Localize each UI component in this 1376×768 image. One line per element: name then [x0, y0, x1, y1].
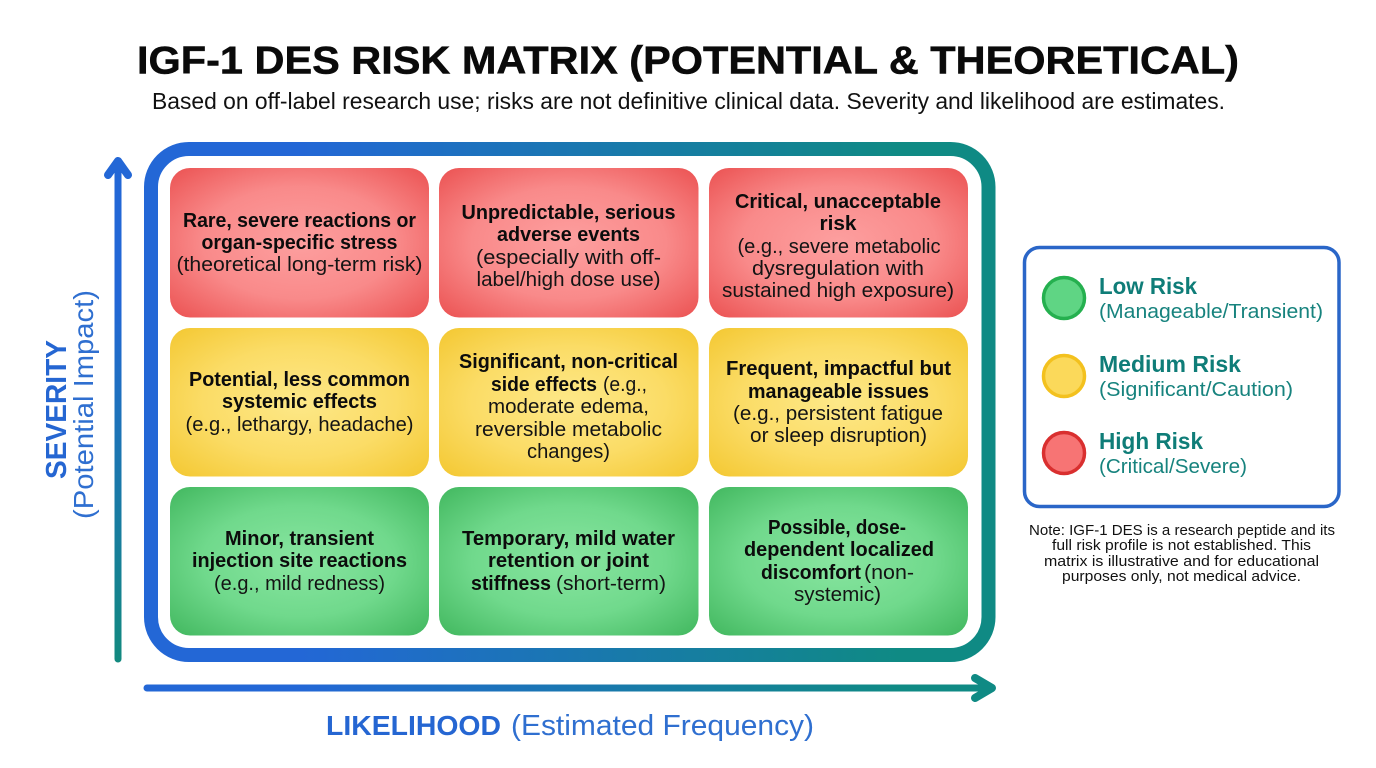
cell: localized discomfort (low risk): Possible, dose- [768, 516, 906, 539]
cell: significant side effects (medium risk): changes) [527, 441, 610, 463]
cell: localized discomfort (low risk): discomfort [761, 561, 861, 584]
cell: unpredictable serious events (high risk): (especially with off- [476, 247, 661, 269]
cell: critical unacceptable risk (high risk): sustained high exposure) [722, 280, 954, 302]
y axis label: severity: SEVERITY [41, 340, 73, 479]
cell: unpredictable serious events (high risk): adverse events [497, 223, 640, 246]
y axis arrow: severity [108, 161, 128, 659]
legend item: medium risk: Medium Risk [1099, 351, 1241, 377]
subtitle: Based on off-label research use; risks are not definitive clinical data. Severity and likelihood are estimates. [152, 88, 1225, 114]
legend item: medium risk: (Significant/Caution) [1099, 378, 1293, 401]
cell: temporary water retention (low risk): (short-term) [556, 573, 666, 595]
cell: frequent manageable issues (medium risk): Frequent, impactful but [726, 357, 951, 380]
cell: localized discomfort (low risk) [709, 487, 968, 636]
cell: critical unacceptable risk (high risk) [709, 168, 968, 318]
x axis label: likelihood: (Estimated Frequency) [511, 710, 814, 742]
cell: critical unacceptable risk (high risk): (e.g., severe metabolic [738, 236, 940, 258]
cell: minor injection site reactions (low risk): injection site reactions [192, 549, 407, 572]
cell: frequent manageable issues (medium risk): or sleep disruption) [750, 425, 927, 447]
cell: significant side effects (medium risk) [439, 328, 698, 476]
cell: unpredictable serious events (high risk) [439, 168, 698, 318]
title: IGF-1 DES RISK MATRIX (POTENTIAL & THEORETICAL) [137, 40, 1239, 82]
cell: frequent manageable issues (medium risk): (e.g., persistent fatigue [733, 403, 943, 425]
y axis label: severity: (Potential Impact) [68, 290, 99, 519]
cell: temporary water retention (low risk): stiffness [471, 572, 551, 595]
cell: significant side effects (medium risk): (e.g., [603, 374, 647, 396]
cell: significant side effects (medium risk): Significant, non-critical [459, 350, 678, 373]
legend item: low risk: (Manageable/Transient) [1099, 300, 1323, 323]
cell: unpredictable serious events (high risk): label/high dose use) [476, 269, 660, 291]
x axis arrow: likelihood [147, 678, 992, 698]
legend item: high risk [1044, 428, 1247, 478]
x axis label: likelihood: LIKELIHOOD [326, 710, 501, 741]
y axis label: severity [41, 290, 99, 519]
cell: unpredictable serious events (high risk): Unpredictable, serious [462, 201, 676, 224]
cell: rare severe reactions (high risk): (theoretical long-term risk) [176, 254, 422, 276]
cell: rare severe reactions (high risk): organ-specific stress [202, 231, 398, 254]
cell: localized discomfort (low risk): dependent localized [744, 538, 934, 561]
cell: localized discomfort (low risk): (non- [864, 562, 914, 584]
note: matrix is illustrative and for educational [1044, 553, 1319, 570]
panel: legend [1024, 248, 1339, 506]
cell: minor injection site reactions (low risk): (e.g., mild redness) [214, 573, 385, 595]
cell: minor injection site reactions (low risk): Minor, transient [225, 527, 374, 550]
legend item: high risk: High Risk [1099, 428, 1203, 454]
cell: potential systemic effects (medium risk): systemic effects [222, 390, 377, 413]
cell: temporary water retention (low risk): Temporary, mild water [462, 527, 675, 550]
legend item: low risk [1044, 273, 1323, 323]
cell: significant side effects (medium risk): moderate edema, [488, 396, 649, 418]
note: full risk profile is not established. This [1052, 537, 1311, 554]
cell: minor injection site reactions (low risk) [170, 487, 429, 636]
cell: significant side effects (medium risk): side effects [491, 373, 597, 396]
matrix frame [151, 149, 988, 655]
cell: potential systemic effects (medium risk): (e.g., lethargy, headache) [186, 414, 414, 436]
cell: rare severe reactions (high risk) [170, 168, 429, 318]
cell: temporary water retention (low risk): retention or joint [488, 549, 649, 572]
note: purposes only, not medical advice. [1062, 568, 1301, 585]
cell: potential systemic effects (medium risk): Potential, less common [189, 368, 410, 391]
cell: temporary water retention (low risk) [439, 487, 698, 636]
cell: potential systemic effects (medium risk) [170, 328, 429, 476]
cell: critical unacceptable risk (high risk): Critical, unacceptable [735, 190, 941, 213]
cell: frequent manageable issues (medium risk): manageable issues [748, 380, 929, 403]
legend item: medium risk [1044, 351, 1293, 401]
cell: critical unacceptable risk (high risk): risk [820, 212, 857, 235]
cell: rare severe reactions (high risk): Rare, severe reactions or [183, 209, 416, 232]
legend item: high risk: (Critical/Severe) [1099, 455, 1247, 478]
cell: critical unacceptable risk (high risk): dysregulation with [752, 258, 924, 280]
panel: risk matrix [151, 149, 988, 655]
cell: frequent manageable issues (medium risk) [709, 328, 968, 476]
cell: significant side effects (medium risk): reversible metabolic [475, 419, 662, 441]
note: Note: IGF-1 DES is a research peptide and its [1029, 522, 1335, 539]
cell: localized discomfort (low risk): systemic) [794, 584, 881, 606]
x axis label: likelihood [326, 710, 814, 742]
note [1029, 522, 1335, 585]
legend item: low risk: Low Risk [1099, 273, 1197, 299]
